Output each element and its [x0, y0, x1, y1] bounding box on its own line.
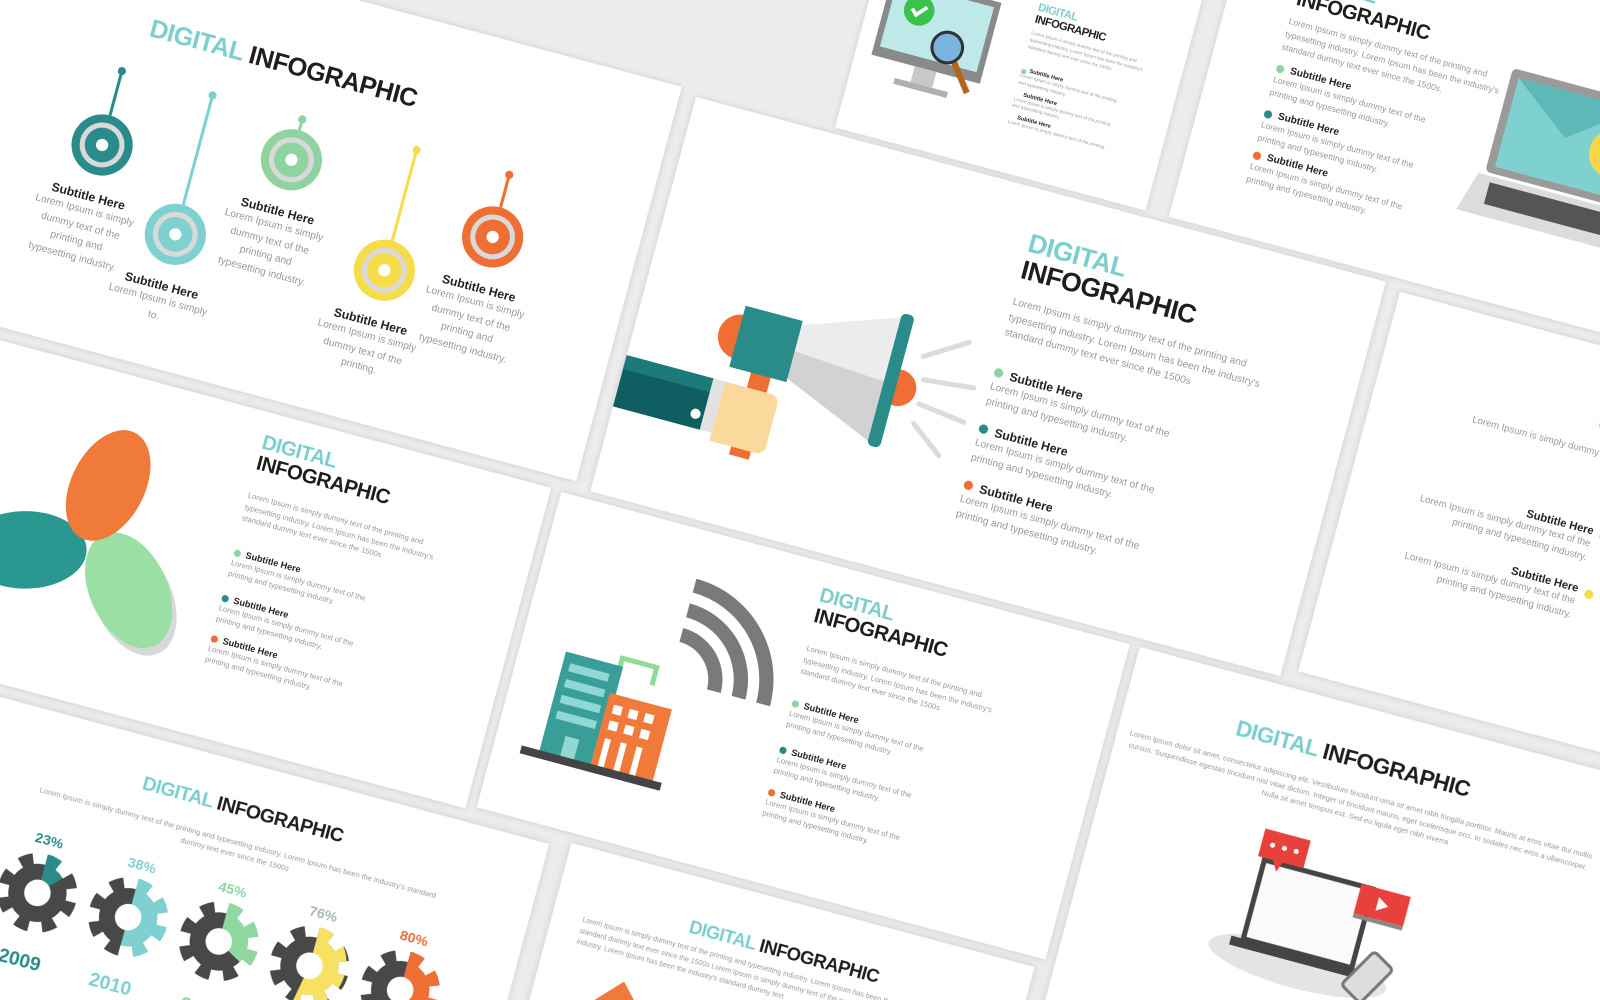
icon: three leaves: [0, 430, 177, 656]
icon: shapes: [594, 981, 634, 1000]
panel: right mirrored slide: [1298, 292, 1600, 803]
bullet list: Subtitle Here: [1023, 92, 1058, 107]
bullet list: Subtitle Here: [1029, 69, 1064, 84]
bullet 2: Subtitle Here: [1277, 111, 1340, 138]
bullet list: [1007, 69, 1117, 150]
panel: bottom right slide: [1034, 647, 1600, 1000]
panel: leaf slide: [0, 303, 551, 808]
bullet 3: Lorem Ipsum is simply dummy text of the printing and typesetting industry.: [204, 644, 344, 692]
title: DIGITAL INFOGRAPHIC: [1233, 715, 1473, 802]
bullet 2: Lorem Ipsum is simply dummy text of the printing and typesetting industry.: [1257, 119, 1415, 174]
panel: gears slide: [0, 694, 550, 1000]
text: item 3: Subtitle Here: [239, 194, 316, 228]
text block: Lorem Ipsum is simply dummy text of the printing and typesetting industry. Lorem Ipsum has been the industry's standard dummy text ever since the 1500s: [799, 644, 993, 714]
panel: circles timeline slide: [0, 0, 682, 481]
bullet 3: Lorem Ipsum is simply dummy text of the printing and typesetting industry.: [761, 797, 901, 846]
title: INFOGRAPHIC: [811, 605, 950, 662]
text block: Lorem Ipsum is simply dummy text of the printing and typesetting industry. Lorem Ipsum has been the industry's standard dummy text ever since the 1500s.: [1281, 16, 1500, 96]
text: item 5: Subtitle Here: [441, 272, 517, 305]
bullet 2: Lorem Ipsum is simply dummy text of the printing and typesetting industry.: [970, 437, 1156, 501]
bullet 1: Lorem Ipsum is simply dummy text of the printing and typesetting industry.: [1419, 493, 1592, 564]
title: DIGITAL: [817, 584, 897, 626]
icon: building with wifi: [520, 578, 774, 791]
bullet list: Lorem Ipsum is simply dummy text of the printing and typesetting industry.: [1018, 73, 1117, 103]
text: item 3: Lorem Ipsum is simply dummy text of the printing and typesetting industry.: [217, 207, 324, 288]
bullet 1: Subtitle Here: [1525, 508, 1595, 538]
text block: intro: Lorem Ipsum is simply dummy text of the printing and typesetting industry. Lorem Ipsum has been the industry's standard dummy text ever since the 1500s: [1003, 296, 1261, 390]
bullet 1: Lorem Ipsum is simply dummy text of the printing and typesetting industry.: [227, 558, 367, 606]
panel: megaphone slide: [590, 97, 1386, 676]
icon: monitor with check and magnifier: [872, 0, 1002, 98]
bullet 3: Lorem Ipsum is simply dummy text of the printing and typesetting industry.: [1245, 161, 1404, 215]
bullet list: Subtitle Here: [1016, 115, 1051, 130]
panel: laptop slide: [1169, 0, 1600, 375]
text block: Lorem ipsum dolor sit amet, consectetur adipiscing elit. Vestibulum tincidunt urna sit amet nibh fringilla porttitor. Mauris at eros vitae dui mollis cursus. Suspendisse egestas tincidunt nisl vitae dictum. Integer ut tincidunt mauris, eget scelerisque orci. In sodales nec eros a ullamcorper. Nulla sit amet tempus est. Sed eu ligula eget nibh viverra: [1128, 728, 1593, 872]
icon: laptop with video and chat: [1208, 828, 1411, 1000]
title: INFOGRAPHIC: [1018, 254, 1200, 330]
panel: wifi building slide: [477, 492, 1130, 960]
chart: pin circles: [72, 67, 524, 301]
bullet 2: Lorem Ipsum is simply dummy text of the printing and typesetting industry.: [773, 755, 912, 803]
text: item 1: Lorem Ipsum is simply dummy text of the printing and typesetting industry.: [27, 192, 135, 273]
chart: gears: 2010: [86, 968, 134, 1000]
bullet 3: Subtitle Here: [1266, 153, 1329, 180]
bullet 2: Subtitle Here: [790, 747, 848, 772]
chart: gears: 23%: [33, 830, 65, 853]
bullet 1: Subtitle Here: [245, 550, 302, 575]
text: item 4: Lorem Ipsum is simply dummy text of the printing.: [316, 317, 417, 376]
bullet 3: Subtitle Here: [978, 482, 1054, 515]
text block: Lorem Ipsum is simply dummy text of the printing and typesetting industry. Lorem Ipsum has been the industry's standard dummy text ever since the 1500s: [1027, 30, 1143, 72]
title: DIGITAL INFOGRAPHIC: [140, 773, 346, 847]
text block: Lorem Ipsum is simply dummy text of the printing and typesetting industry. Lorem Ipsum has been the industry's standard dummy text ever since the 1500s: [241, 491, 435, 561]
chart: gears: 76%: [307, 903, 339, 926]
bullet 1: Lorem Ipsum is simply dummy text of the printing and typesetting industry.: [1269, 74, 1427, 129]
bullet 1: Lorem Ipsum is simply dummy text of the printing and typesetting industry.: [985, 381, 1171, 445]
bullet 2: Subtitle Here: [993, 426, 1070, 459]
text block: Lorem Ipsum is simply dummy text of the printing and typesetting industry. Lorem Ipsum has been the industry's standard dummy text ever since the 1500s: [39, 785, 437, 900]
chart: gears: 80%: [398, 927, 430, 950]
bullet 3: Lorem Ipsum is simply dummy text of the printing and typesetting industry.: [955, 493, 1141, 557]
title: DIGITAL INFOGRAPHIC: [687, 916, 881, 987]
panel: monitor slide: [835, 0, 1225, 211]
title: INFOGRAPHIC: [254, 452, 392, 509]
title: INFOGRAPHIC: [1034, 13, 1107, 44]
chart: gears: [0, 830, 440, 1000]
chart: gears: 45%: [217, 879, 249, 902]
text: item 1: Subtitle Here: [50, 180, 127, 213]
bullet 1: Subtitle Here: [1008, 370, 1085, 403]
bullet list: Lorem Ipsum is simply dummy text of the printing and typesetting industry.: [1012, 96, 1111, 126]
bullet 1: Lorem Ipsum is simply dummy text of the printing and typesetting industry.: [785, 709, 925, 757]
bullet 2: Subtitle Here: [232, 595, 290, 620]
bullet 2: Subtitle Here: [1510, 565, 1580, 595]
text: item 2: Lorem Ipsum is simply to.: [107, 281, 208, 322]
title: DIGITAL INFOGRAPHIC: [147, 14, 420, 113]
bullet 1: Subtitle Here: [803, 701, 860, 725]
bullet list: Lorem Ipsum is simply dummy text of the printing.: [1007, 119, 1106, 150]
icon: megaphone with hand: [613, 306, 976, 460]
text: item 2: Subtitle Here: [123, 269, 200, 302]
bullet 2: Lorem Ipsum is simply dummy text of the printing and typesetting industry.: [215, 603, 355, 651]
title: DIGITAL: [1037, 2, 1079, 24]
bullet 1: Subtitle Here: [1289, 66, 1352, 93]
title: DIGITAL: [1025, 227, 1130, 283]
bullet 3: Subtitle Here: [779, 790, 836, 814]
text: item 4: Subtitle Here: [332, 305, 409, 338]
bullet 3: Subtitle Here: [222, 636, 279, 660]
title: DIGITAL: [259, 431, 339, 473]
bullet 2: Lorem Ipsum is simply dummy text of the printing and typesetting industry.: [1403, 550, 1576, 621]
icon: laptop with coin: [1456, 69, 1600, 248]
chart: gears: 38%: [126, 855, 158, 877]
text: item 5: Lorem Ipsum is simply dummy text of the printing and typesetting industry.: [418, 284, 526, 365]
panel: bottom middle slide: [492, 843, 1035, 1000]
